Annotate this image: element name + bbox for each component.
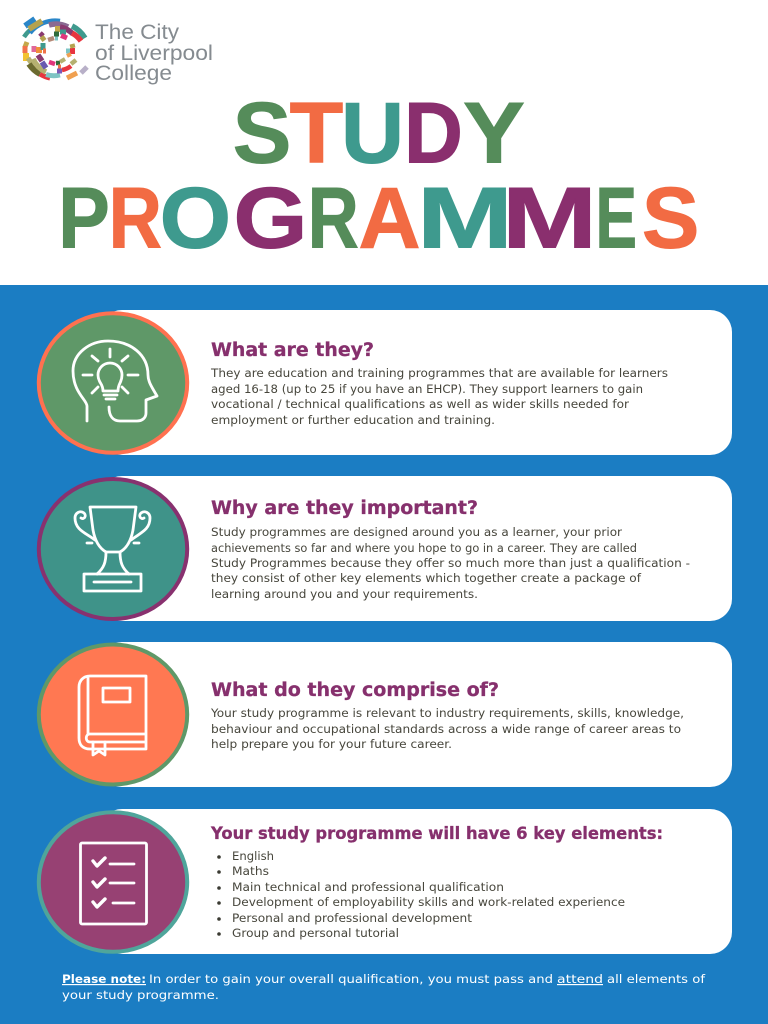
body text: they consist of other key elements which together create a package of: [211, 572, 642, 585]
bullet list: Main technical and professional qualification: [232, 881, 504, 894]
title: STUDY PROGRAMMES: M: [502, 170, 597, 266]
title: STUDY PROGRAMMES: U: [341, 86, 404, 182]
logo: The City of Liverpool College: [24, 19, 213, 85]
logo wordmark: The City: [95, 20, 179, 44]
title: STUDY PROGRAMMES: A: [358, 170, 420, 266]
heading: What do they comprise of?: [211, 680, 499, 701]
body text: [211, 526, 690, 601]
icon circle: purple: [39, 812, 187, 952]
body text: employment or further education and training.: [211, 414, 495, 427]
heading: Your study programme will have 6 key elements:: [210, 823, 663, 843]
title: STUDY PROGRAMMES: S: [642, 170, 699, 266]
logo mark: coloured arc segments: [24, 19, 87, 78]
body text: behaviour and occupational standards across a wide range of career areas to: [211, 723, 681, 736]
logo wordmark: of Liverpool: [95, 41, 213, 65]
body text: Study programmes are designed around you as a learner, your prior: [211, 526, 622, 539]
bullet list: Development of employability skills and work-related experience: [232, 896, 625, 909]
title: STUDY PROGRAMMES: M: [417, 170, 513, 266]
body text: learning around you and your requirements.: [211, 588, 478, 601]
bullet list: Group and personal tutorial: [232, 927, 399, 940]
icon: trophy: [75, 507, 150, 591]
card background: [100, 642, 732, 787]
title: STUDY PROGRAMMES: E: [596, 170, 637, 266]
bullet list: Maths: [232, 865, 269, 878]
panel: what do they comprise of: [39, 642, 732, 787]
title: STUDY PROGRAMMES: S: [233, 86, 291, 182]
footnote: please note: Please note:: [62, 972, 146, 986]
body text: [210, 367, 668, 427]
bullet list: Personal and professional development: [232, 912, 473, 925]
icon circle: teal: [39, 479, 187, 619]
panel: why are they important: [39, 476, 732, 621]
body text: achievements so far and where you hope to go in a career. They are called: [211, 542, 637, 555]
card background: [100, 476, 732, 621]
title: STUDY PROGRAMMES: Y: [463, 86, 525, 182]
icon circle: orange: [39, 644, 187, 784]
body text: Study Programmes because they offer so much more than just a qualification -: [211, 557, 690, 570]
logo wordmark: College: [95, 61, 172, 85]
title: STUDY PROGRAMMES: P: [58, 170, 110, 266]
heading: What are they?: [211, 340, 374, 361]
title: STUDY PROGRAMMES: R: [308, 170, 359, 266]
panel: six key elements: [39, 809, 732, 954]
card background: [100, 809, 732, 954]
icon: head with light bulb: [73, 341, 157, 421]
title: STUDY PROGRAMMES: [58, 86, 699, 266]
footnote: please note: In order to gain your overall qualification, you must pass and: [149, 972, 553, 986]
icon circle: green: [39, 313, 187, 453]
title: STUDY PROGRAMMES: O: [160, 170, 231, 266]
body text: [210, 707, 684, 751]
body text: vocational / technical qualifications as well as wider skills needed for: [211, 398, 629, 411]
footnote: please note: [62, 972, 706, 1002]
title: STUDY PROGRAMMES: R: [109, 170, 162, 266]
logo wordmark: [95, 20, 213, 85]
title: STUDY PROGRAMMES: D: [404, 86, 463, 182]
body text: help prepare you for your future career.: [211, 738, 452, 751]
title: STUDY PROGRAMMES: G: [234, 170, 308, 266]
icon: book: [79, 676, 146, 755]
icon: checklist: [80, 843, 146, 924]
blue background panel: [0, 285, 768, 1024]
footnote: please note: attend: [557, 972, 603, 986]
body text: They are education and training programmes that are available for learners: [210, 367, 668, 380]
title: STUDY PROGRAMMES: T: [290, 86, 343, 182]
body text: Your study programme is relevant to industry requirements, skills, knowledge,: [210, 707, 684, 720]
footnote: please note: your study programme.: [62, 988, 219, 1002]
card background: [100, 310, 732, 455]
footnote: please note: all elements of: [607, 972, 706, 986]
panel: what are they: [39, 310, 732, 455]
body text: aged 16-18 (up to 25 if you have an EHCP). They support learners to gain: [211, 383, 643, 396]
heading: Why are they important?: [211, 498, 478, 519]
bullet list: English: [232, 850, 274, 863]
bullet list: [217, 850, 625, 940]
